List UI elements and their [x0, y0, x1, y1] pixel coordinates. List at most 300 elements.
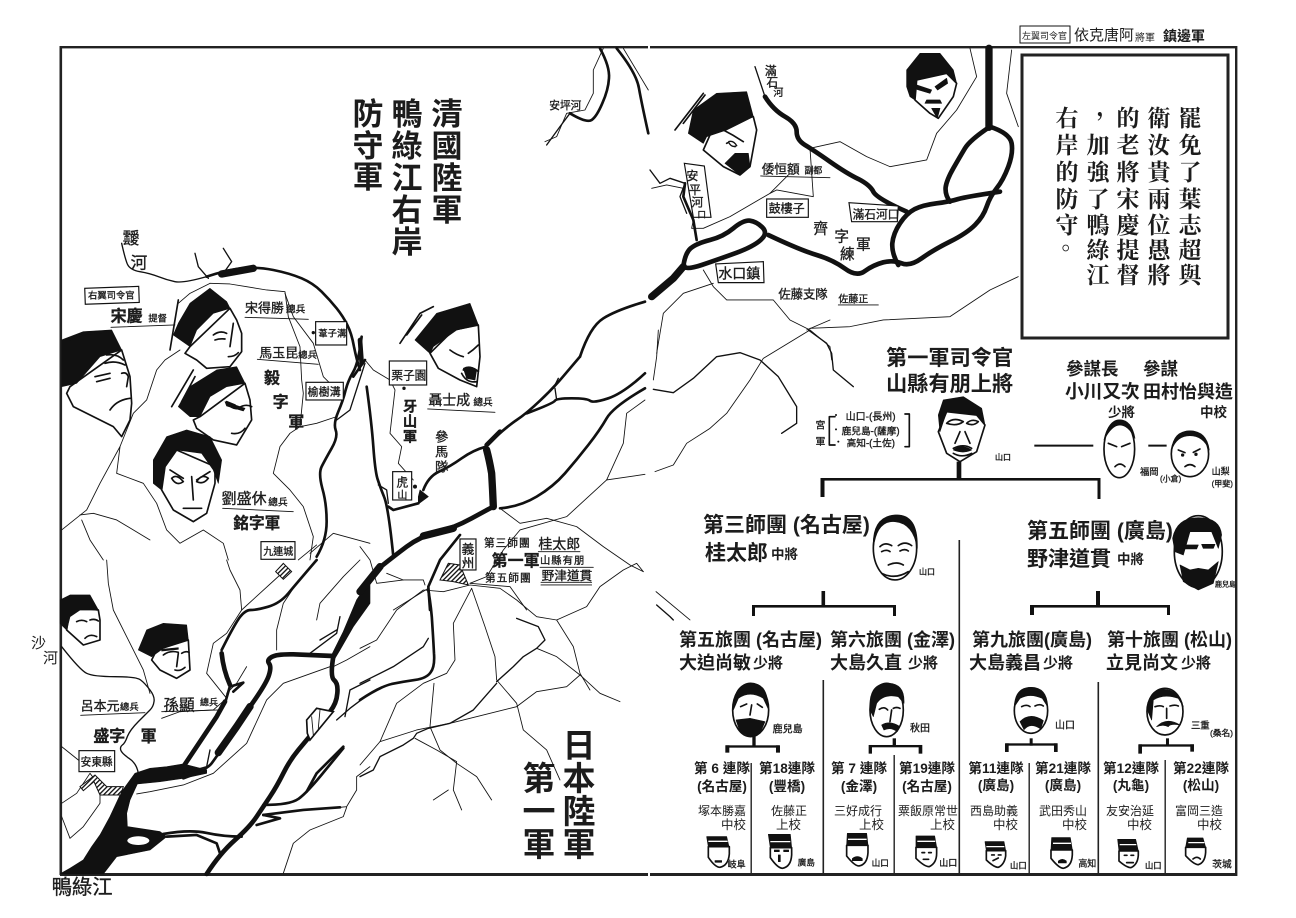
- regiment commander portraits, left group: 岐阜: [728, 858, 746, 869]
- regiment commander names: 中校: [1197, 817, 1222, 832]
- label: Yashan army: 牙: [403, 400, 417, 416]
- org chart: staff titles: 參謀: [1143, 359, 1178, 379]
- Fifth Division heading: 中將: [1117, 551, 1144, 567]
- label: Manshi river mouth: [849, 203, 899, 222]
- label: Manshi river: 滿: [765, 65, 777, 78]
- portrait: Ma Yukun: [172, 367, 252, 445]
- brigade portraits 5 and 6 with regiment brackets: [725, 683, 930, 754]
- note panel: replacement of generals: 守: [1056, 213, 1078, 238]
- label: Yi army: 毅: [264, 368, 280, 387]
- label: Yushugou: 榆樹溝: [308, 384, 341, 398]
- regiment commander names: 中校: [1062, 817, 1087, 832]
- portrait: Nozu: [1173, 516, 1222, 590]
- staff connector lines: [1034, 443, 1167, 449]
- brigade headings: 大島義昌: [969, 653, 1041, 673]
- note panel: replacement of generals: 葉: [1178, 187, 1202, 212]
- brigade headings: 第十旅團 (松山): [1107, 629, 1232, 650]
- regiment labels: 第12連隊: [1103, 760, 1159, 776]
- note panel: replacement of generals: 綠: [1086, 238, 1110, 263]
- staff home prefectures: 福岡: [1140, 466, 1159, 477]
- Third Division heading: 第三師團 (名古屋): [703, 514, 870, 537]
- note panel: replacement of generals: 衛: [1148, 106, 1170, 131]
- org chart: river lines behind commander: [653, 330, 853, 620]
- brigade portraits 9 and 10 with regiment brackets: 山口: [1055, 719, 1075, 731]
- note panel: replacement of generals: 了: [1086, 187, 1110, 212]
- note panel: replacement of generals: 將: [1116, 160, 1140, 185]
- portrait: Takeda: [1051, 838, 1072, 868]
- label: Yi army: 字: [273, 392, 289, 411]
- brigade headings: 少將: [1043, 654, 1073, 672]
- bracket: 7 and 19 regiments: [869, 738, 922, 754]
- portrait: Awaihara: [916, 836, 937, 867]
- regiment commander portraits, left group: 山口: [939, 858, 957, 868]
- label: Nie Shicheng: 聶士成: [428, 392, 470, 408]
- regiment commander names: 中校: [1127, 817, 1152, 832]
- Andong fortress wall: [80, 775, 123, 795]
- regiment labels: 第19連隊: [899, 760, 955, 776]
- top level portraits and links: 鹿兒島: [1215, 580, 1236, 589]
- regiment commander portraits, left group: [707, 833, 957, 869]
- regiment labels: (名古屋): [697, 778, 747, 794]
- label: Qi army: 軍: [856, 237, 871, 253]
- heading: Japanese First Army: 一: [522, 793, 556, 830]
- label: Lizhiyuan: [389, 361, 427, 390]
- brigade portraits 5 and 6 with regiment brackets: 秋田: [910, 722, 930, 735]
- note panel: replacement of generals: 右: [1056, 106, 1078, 131]
- label: Sun Xian: 總兵: [200, 696, 218, 707]
- label: Sha river: [31, 635, 58, 667]
- portrait: Song Desheng: [170, 288, 242, 368]
- heading: Japanese First Army: 軍: [562, 826, 596, 863]
- label: Yizhou: [460, 539, 476, 570]
- org chart: First Army commander title: 山縣有朋上將: [886, 371, 1013, 396]
- note panel: replacement of generals: 。: [1062, 229, 1084, 254]
- heading: Qing army defence force on the right bank of the Yalu: 陸: [432, 161, 462, 196]
- regiment commander names: 武田秀山: [1039, 804, 1087, 818]
- portrait: Yamagata: [938, 397, 985, 462]
- brigade headings: 少將: [1181, 654, 1211, 672]
- label: Shuikou town: [716, 262, 764, 283]
- Third Division heading: [703, 514, 870, 565]
- heading: Japanese First Army: 本: [562, 760, 596, 797]
- staff home prefectures: (甲斐): [1212, 479, 1233, 489]
- label: Weizigou: 葦子溝: [318, 328, 346, 339]
- note panel: replacement of generals: ，: [1096, 95, 1120, 121]
- label: Ma Yukun: [257, 345, 318, 364]
- label: Aihe river: [123, 229, 148, 273]
- label: Lizhiyuan: 栗子園: [391, 369, 426, 382]
- note panel: replacement of generals: 鴨: [1086, 213, 1110, 238]
- label: Song Qing commander: 宋慶: [111, 307, 143, 326]
- label: Sheng army: 軍: [141, 729, 157, 746]
- label: Manshi river: 河: [773, 87, 783, 99]
- org chart: staff titles: 田村怡與造: [1143, 382, 1233, 402]
- top caption: left wing commander Yi Ketang'a: 依克唐阿: [1074, 27, 1134, 44]
- Fifth Division heading: 野津道貫: [1027, 548, 1111, 571]
- portrait: Sato: [768, 834, 792, 868]
- regiment commander portraits, left group: 廣島: [798, 857, 815, 868]
- label: Qi army: [813, 219, 871, 263]
- label: Fifth Division, Nozu: 第五師團: [485, 572, 532, 585]
- note panel: replacement of generals: 的: [1116, 106, 1140, 131]
- label: Song Qing commander: 右翼司令官: [88, 290, 135, 301]
- top caption: left wing commander Yi Ketang'a: 將軍: [1135, 31, 1155, 44]
- label: Wo Henge: [761, 162, 830, 178]
- portrait: Oshima Yoshimasa: [1014, 687, 1048, 733]
- label: Jiuliancheng: 九連城: [263, 545, 293, 558]
- regiment commander portraits, right group: 高知: [1078, 858, 1096, 869]
- heading: Japanese First Army: 陸: [562, 793, 596, 830]
- regiment commander names: 上校: [859, 817, 884, 832]
- label: Hushan: [393, 472, 417, 501]
- label: Yushugou: [306, 382, 343, 400]
- label: Sheng army: 盛字: [93, 727, 125, 746]
- label: Sha river: 河: [43, 650, 58, 667]
- label: Weizigou: [312, 322, 347, 345]
- portrait: Tatsumi: [1147, 688, 1183, 735]
- org chart: staff titles: 中校: [1200, 404, 1228, 420]
- heading: Japanese First Army: [522, 727, 596, 863]
- label: Third Division, Katsura: [484, 536, 580, 552]
- note panel: replacement of generals: 位: [1148, 213, 1170, 238]
- brigade headings: [679, 629, 1232, 673]
- regiment labels: (名古屋): [902, 778, 952, 794]
- heading: Japanese First Army: 日: [562, 727, 596, 764]
- note panel: replacement of generals: 提: [1116, 238, 1140, 263]
- portrait: Oshima Hisanao: [870, 683, 904, 737]
- rivers: [650, 48, 1018, 360]
- top level portraits and links: 山口: [919, 566, 935, 576]
- label: Yashan army: [403, 400, 417, 446]
- heading: Qing army defence force on the right bank of the Yalu: [352, 97, 462, 260]
- label: Andong county: [79, 751, 115, 772]
- brigade headings: 少將: [908, 654, 938, 672]
- label: Gulouzi: [767, 199, 808, 217]
- label: Lü Benyuan: 呂本元: [81, 699, 120, 714]
- regiment commander names: 塚本勝嘉: [698, 803, 746, 818]
- label: Sha river: 沙: [31, 635, 46, 652]
- note panel: replacement of generals: 免: [1178, 133, 1202, 158]
- label: Yashan army: 軍: [403, 429, 417, 446]
- label: Liu Shengxiu: [222, 490, 293, 512]
- regiment labels: 第18連隊: [759, 760, 815, 776]
- portrait: Yi Ketang'a: [907, 53, 957, 118]
- left page rivers: lower right tributaries: [360, 563, 643, 810]
- regiment labels: (廣島): [1045, 777, 1081, 793]
- org chart: staff titles: 少將: [1108, 404, 1135, 420]
- left page rivers: central channels: [360, 302, 645, 610]
- thin border lines: [210, 283, 313, 560]
- regiment commander portraits, right group: 山口: [1010, 860, 1027, 870]
- note panel: replacement of generals: 貴: [1148, 160, 1174, 185]
- regiment labels: 第11連隊: [968, 760, 1024, 776]
- label: Sato detachment: 佐藤正: [838, 293, 868, 305]
- regiment labels: 第 7 連隊: [831, 760, 887, 776]
- portrait: Nishijima: [985, 842, 1006, 867]
- bracket: 6 and 18 regiments: [725, 736, 780, 753]
- note panel: replacement of generals: 的: [1056, 160, 1078, 185]
- regiment commander names: 中校: [993, 817, 1018, 832]
- label: Nie Shicheng: [428, 392, 495, 412]
- label: Jiuliancheng: [261, 542, 295, 559]
- label: Yashan army: 山: [403, 414, 417, 431]
- central portrait and labels: Nie Shicheng, Hushan, Yizhou: [389, 303, 593, 585]
- right page map: Yalu loops and labels: [650, 48, 1018, 360]
- island: [307, 708, 333, 740]
- staff home prefectures: [1140, 465, 1233, 489]
- clan note bracket: 宮: [816, 419, 825, 431]
- Fifth Division heading: [1027, 520, 1173, 571]
- clan note bracket: 軍: [816, 437, 826, 448]
- regiment commander names: 友安治延: [1106, 803, 1154, 818]
- org chart: staff titles: 小川又次: [1065, 381, 1140, 402]
- link to Yamagata: [957, 462, 961, 478]
- regiment commander names: 富岡三造: [1175, 803, 1223, 818]
- note panel: replacement of generals: 兩: [1148, 187, 1170, 212]
- brigade headings: 少將: [753, 654, 783, 672]
- note panel: replacement of generals: 老: [1116, 133, 1140, 158]
- brigade portraits 9 and 10 with regiment brackets: 三重: [1191, 719, 1210, 730]
- label: Anping river mouth: 河: [691, 196, 703, 210]
- Third Division heading: 中將: [771, 546, 798, 562]
- label: Qi army: 字: [834, 229, 849, 246]
- org chart: dividers: [750, 540, 1166, 874]
- regiment commander names: 中校: [721, 817, 746, 832]
- regiment commander portraits, right group: [985, 838, 1232, 870]
- label: Nie Shicheng: 總兵: [473, 397, 493, 409]
- heading: Qing army defence force on the right bank of the Yalu: 守: [352, 129, 384, 164]
- brigade headings: 第六旅團 (金澤): [830, 629, 955, 650]
- note panel: replacement of generals: 與: [1178, 263, 1204, 288]
- label: Yalu river: 鴨綠江: [52, 876, 113, 899]
- heading: Qing army defence force on the right bank of the Yalu: 鴨: [392, 97, 422, 132]
- label: Song Qing commander: [85, 286, 175, 327]
- bracket: 11 and 21 regiments: [1005, 738, 1058, 752]
- label: Aihe river: 靉: [123, 229, 140, 248]
- label: First Army, Yamagata: 山縣有朋: [540, 554, 585, 567]
- brigade headings: 立見尚文: [1106, 652, 1178, 673]
- portrait: Tamura: [1171, 431, 1209, 477]
- portrait: Ogawa: [1104, 420, 1135, 478]
- left page rivers: upper river arc: [62, 243, 370, 560]
- heading: Qing army defence force on the right bank of the Yalu: 清: [432, 97, 462, 132]
- label: Anping river mouth: 口: [697, 209, 706, 219]
- heading: Japanese First Army: 第: [522, 760, 556, 797]
- note panel: replacement of generals: 宋: [1116, 187, 1140, 212]
- label: Sato detachment: [778, 286, 878, 305]
- label: Qi army: 練: [840, 246, 855, 263]
- top level portraits and links: [816, 397, 1236, 590]
- label: Yizhou: 州: [462, 556, 474, 570]
- top caption: left wing commander Yi Ketang'a: 左翼司令官: [1022, 30, 1067, 41]
- regiment commander names: [698, 803, 1223, 832]
- label: cavalry unit: [435, 430, 448, 475]
- top caption: left wing commander Yi Ketang'a: [1020, 26, 1205, 44]
- heading: Qing army defence force on the right bank of the Yalu: 軍: [432, 193, 462, 228]
- portrait: general with feather: [675, 92, 757, 175]
- label: Fifth Division, Nozu: [485, 569, 592, 585]
- note panel: replacement of generals: 志: [1178, 213, 1204, 238]
- regiment labels: (松山): [1183, 778, 1219, 793]
- note panel: replacement of generals: 了: [1178, 160, 1202, 185]
- note panel: replacement of generals: 超: [1178, 238, 1202, 263]
- label: Song Desheng: [245, 300, 308, 319]
- portrait: Osako: [733, 683, 769, 737]
- label: Aihe river: 河: [131, 254, 148, 273]
- label: Fifth Division, Nozu: 野津道貫: [542, 569, 592, 583]
- staff home prefectures: (小倉): [1160, 474, 1182, 484]
- regiment labels: 第21連隊: [1035, 760, 1091, 776]
- label: Andong county: 安東縣: [81, 755, 113, 768]
- regiment commander names: 粟飯原常世: [898, 803, 958, 818]
- bracket: 12 and 22 regiments: [1138, 738, 1194, 754]
- label: Wo Henge: 倭恒額: [762, 162, 800, 176]
- label: First Army, Yamagata: 第一軍: [492, 551, 540, 570]
- label: Hushan: 山: [397, 489, 407, 501]
- regiment commander names: 佐藤正: [771, 804, 807, 818]
- top caption: left wing commander Yi Ketang'a: 鎮邊軍: [1163, 28, 1205, 44]
- regiment commander names: 上校: [930, 817, 955, 832]
- note panel: replacement of generals: 岸: [1056, 133, 1078, 158]
- label: Ming army: 銘字軍: [233, 514, 280, 533]
- regiment labels: 第22連隊: [1173, 760, 1229, 776]
- label: Song Qing commander: 提督: [148, 312, 167, 323]
- portrait: Katsura: [873, 515, 917, 580]
- org chart: First Army commander title: 第一軍司令官: [886, 345, 1013, 370]
- portrait: Miyoshi: [847, 833, 868, 866]
- label: Wo Henge: 副都: [804, 165, 822, 175]
- brigade headings: 大島久直: [830, 652, 902, 673]
- regiment commander portraits, right group: 山口: [1145, 860, 1162, 870]
- label: Shuikou town: 水口鎮: [718, 266, 760, 282]
- note panel: replacement of generals: 加: [1086, 133, 1110, 158]
- label: Anping river mouth: 平: [689, 183, 701, 197]
- label: Sato detachment: 佐藤支隊: [778, 286, 828, 301]
- staff home prefectures: 山梨: [1212, 465, 1230, 476]
- regiment labels: (廣島): [978, 777, 1014, 793]
- regiment labels: (丸龜): [1113, 777, 1149, 793]
- regiment labels: (金澤): [841, 778, 877, 794]
- heading: Qing army defence force on the right bank of the Yalu: 軍: [352, 160, 384, 195]
- label: Manshi river mouth: 滿石河口: [853, 208, 899, 221]
- heading: Qing army defence force on the right bank of the Yalu: 防: [352, 97, 384, 132]
- note panel: replacement of generals: 江: [1086, 263, 1110, 288]
- label: Anping river: 安坪河: [549, 99, 582, 112]
- heading: Qing army defence force on the right bank of the Yalu: 國: [432, 129, 462, 164]
- regiment commander names: 上校: [776, 817, 801, 832]
- portrait: Tomoyasu: [1118, 839, 1138, 868]
- label: Sheng army: [93, 727, 157, 746]
- regiment commander portraits, right group: 茨城: [1212, 858, 1232, 870]
- clan note bracket: [816, 411, 909, 450]
- org chart: division brackets: [752, 478, 1170, 616]
- regiment labels: 第 6 連隊: [694, 760, 750, 776]
- brigade portraits 5 and 6 with regiment brackets: 鹿兒島: [773, 723, 803, 736]
- portrait: Song Qing: [62, 330, 132, 437]
- label: Anping river mouth: [684, 163, 711, 219]
- label: Ma Yukun: 馬玉昆: [259, 345, 298, 360]
- brigade headings: 大迫尚敏: [679, 653, 751, 673]
- heading: Japanese First Army: 軍: [522, 826, 556, 863]
- label: Sun Xian: [162, 696, 220, 715]
- portrait: Lü Benyuan: [60, 595, 100, 645]
- regiment labels: [694, 760, 1229, 794]
- portrait group and labels: Song Qing's Yi army: [62, 229, 347, 559]
- note panel: replacement of generals: 愚: [1148, 238, 1172, 263]
- label: Yi army: 軍: [288, 414, 304, 431]
- org chart: staff titles: [1065, 359, 1233, 420]
- brigade headings: 第五旅團 (名古屋): [679, 629, 822, 650]
- brigade portraits 9 and 10 with regiment brackets: (桑名): [1210, 727, 1233, 738]
- portrait group and labels: Sheng army: [52, 595, 220, 899]
- regiment commander names: 西島助義: [970, 803, 1018, 818]
- portrait: Tsukamoto: [707, 837, 729, 867]
- brigade headings: 第九旅團(廣島): [972, 629, 1092, 650]
- label: Manshi river: [765, 65, 783, 99]
- label: Liu Shengxiu: 劉盛休: [222, 490, 267, 507]
- note panel: replacement of generals: 強: [1086, 160, 1112, 185]
- note panel: replacement of generals: 防: [1056, 187, 1078, 212]
- label: Ma Yukun: 總兵: [298, 349, 317, 360]
- clan note bracket: 鹿兒島-(薩摩): [842, 425, 900, 437]
- note panel: replacement of generals: 汝: [1148, 133, 1172, 158]
- Fifth Division heading: 第五師團 (廣島): [1027, 520, 1173, 543]
- label: Song Desheng: 宋得勝: [245, 300, 284, 315]
- label: Lü Benyuan: [81, 699, 145, 715]
- portrait: Sun Xian: [138, 623, 190, 678]
- label: Yizhou: 義: [462, 541, 475, 556]
- label: Third Division, Katsura: 第三師團: [484, 537, 531, 550]
- label: cavalry unit: 參: [435, 430, 448, 445]
- brigade portraits 9 and 10 with regiment brackets: [1005, 687, 1233, 754]
- label: cavalry unit: 隊: [435, 460, 448, 475]
- org chart: staff titles: 參謀長: [1066, 359, 1119, 379]
- label: Manshi river: 石: [766, 77, 778, 90]
- regiment commander portraits, left group: 山口: [872, 858, 889, 868]
- note panel: replacement of generals: 慶: [1116, 212, 1140, 238]
- label: Anping river mouth: 安: [686, 168, 698, 183]
- note panel: replacement of generals: 將: [1148, 263, 1170, 288]
- regiment commander names: 三好成行: [834, 804, 882, 818]
- heading: Qing army defence force on the right bank of the Yalu: 江: [392, 161, 422, 196]
- label: Song Desheng: 總兵: [286, 303, 306, 315]
- label: Gulouzi: 鼓樓子: [769, 201, 805, 216]
- heading: Qing army defence force on the right bank of the Yalu: 右: [392, 193, 422, 228]
- top level portraits and links: 山口: [995, 452, 1011, 462]
- left page rivers: Yalu estuary and lower channels: [60, 560, 370, 874]
- label: Sun Xian: 孫顯: [163, 697, 195, 715]
- note panel: replacement of generals: [1022, 55, 1228, 338]
- label: First Army, Yamagata: [492, 551, 593, 570]
- label: Qi army: 齊: [813, 219, 828, 237]
- regiment labels: (豐橋): [769, 778, 805, 794]
- note panel: replacement of generals: 罷: [1178, 106, 1202, 131]
- label: Third Division, Katsura: 桂太郎: [538, 536, 580, 552]
- heading: Qing army defence force on the right bank of the Yalu: 綠: [392, 129, 422, 164]
- label: Yi army: [264, 368, 304, 431]
- clan note bracket: 高知-(土佐): [847, 438, 895, 450]
- heading: Qing army defence force on the right bank of the Yalu: 岸: [392, 225, 422, 260]
- note panel: replacement of generals: 督: [1116, 263, 1140, 288]
- Third Division heading: 桂太郎: [705, 542, 768, 565]
- label: Liu Shengxiu: 總兵: [268, 496, 288, 508]
- label: Lü Benyuan: 總兵: [120, 701, 139, 712]
- top river: Anping river: [545, 48, 648, 145]
- label: Hushan: 虎: [396, 477, 408, 490]
- clan note bracket: 山口-(長州): [846, 411, 896, 423]
- portrait: Nie Shicheng: [400, 303, 480, 387]
- label: cavalry unit: 馬: [435, 445, 448, 460]
